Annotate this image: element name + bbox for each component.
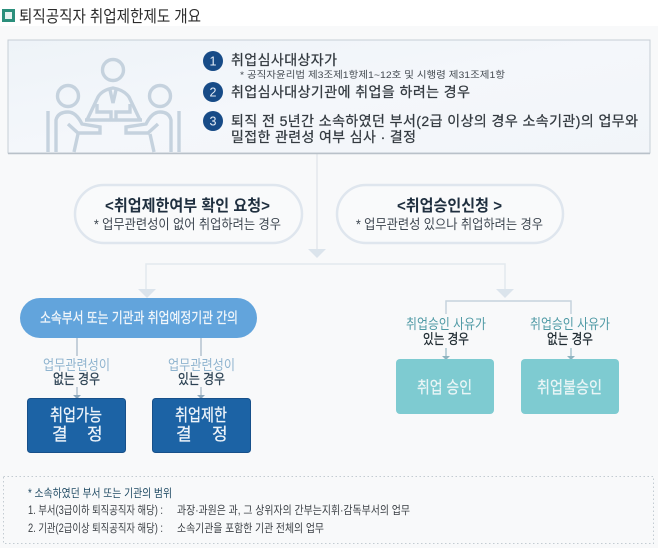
panel: overview [8, 40, 650, 154]
box: employment approved [396, 359, 494, 414]
right branch: approval reason exists: 있는 경우 [423, 331, 469, 347]
box: employment possible: 결 [52, 425, 68, 444]
request pill: employment restriction check [75, 185, 302, 243]
request pill: employment approval application: * 업무관련성 있으나 취업하려는 경우 [356, 217, 543, 232]
request pill: employment approval application [337, 185, 563, 243]
item 1: * 공직자윤리법 제3조제1항제1~12호 및 시행령 제31조제1항 [240, 69, 505, 81]
left branch: relevance: 업무관련성이 [168, 357, 235, 373]
box: employment restricted: 결 [176, 425, 192, 444]
box: employment not approved [521, 359, 619, 414]
pill: department and prospective employer: 소속부서 또는 기관과 취업예정기관 간의 [40, 310, 238, 327]
item 3: 퇴직 전 5년간 소속하였던 부서(2급 이상의 경우 소속기관)의 업무와 [231, 113, 638, 129]
box: employment possible: 취업가능 [50, 406, 102, 425]
left branch: no relevance: 업무관련성이 [43, 357, 110, 373]
box: employment restricted: 정 [212, 425, 228, 444]
left branch: relevance [168, 338, 235, 399]
note heading: * 소속하였던 부서 또는 기관의 범위 [28, 486, 172, 500]
box: employment possible [28, 398, 126, 452]
left branch: relevance: 있는 경우 [178, 371, 225, 387]
item 2: 2 [210, 86, 217, 100]
item 1 [203, 51, 505, 81]
box: employment restricted: 취업제한 [175, 406, 227, 425]
item 1: 1 [210, 54, 217, 68]
note panel: scope of department or agency [4, 476, 654, 544]
connector: panel to requests [316, 153, 318, 250]
icon: meeting people [48, 60, 179, 152]
right branch: approval reason absent: 없는 경우 [547, 331, 593, 347]
item 3: 3 [210, 114, 217, 128]
request pill: employment restriction check: <취업제한여부 확인 요청> [105, 197, 270, 215]
right branch: approval reason absent [530, 316, 610, 360]
pill: department and prospective employer [20, 298, 257, 338]
right branch: approval reason absent: 취업승인 사유가 [530, 316, 610, 332]
arrow: down to branches [138, 249, 514, 298]
item 3: 밀접한 관련성 여부 심사 · 결정 [231, 129, 416, 145]
item 2: 취업심사대상기관에 취업을 하려는 경우 [231, 84, 470, 100]
left branch: no relevance: 없는 경우 [53, 371, 100, 387]
box: employment restricted [152, 398, 250, 452]
right branch connector [446, 301, 571, 314]
note line 2: 2. 기관(2급이상 퇴직공직자 해당) : [28, 522, 163, 535]
note line 1: 1. 부서(3급이하 퇴직공직자 해당) : [28, 503, 163, 517]
box: employment not approved: 취업불승인 [537, 378, 602, 397]
request pill: employment approval application: <취업승인신청 > [397, 197, 502, 215]
item 3 [203, 111, 638, 145]
note line 2: 소속기관을 포함한 기관 전체의 업무 [177, 522, 324, 535]
box: employment approved: 취업 승인 [417, 378, 472, 397]
item 1: 취업심사대상자가 [231, 52, 337, 68]
right branch: approval reason exists [406, 316, 486, 360]
title [4, 7, 201, 26]
box: employment possible: 정 [87, 425, 103, 444]
request pill: employment restriction check: * 업무관련성이 없어 취업하려는 경우 [94, 217, 281, 232]
right branch: approval reason exists: 취업승인 사유가 [406, 316, 486, 332]
icon: title square [4, 10, 14, 20]
left branch: no relevance [43, 338, 110, 399]
note line 1: 과장·과원은 과, 그 상위자의 간부는지휘·감독부서의 업무 [177, 503, 410, 517]
title text: 퇴직공직자 취업제한제도 개요 [19, 7, 201, 26]
